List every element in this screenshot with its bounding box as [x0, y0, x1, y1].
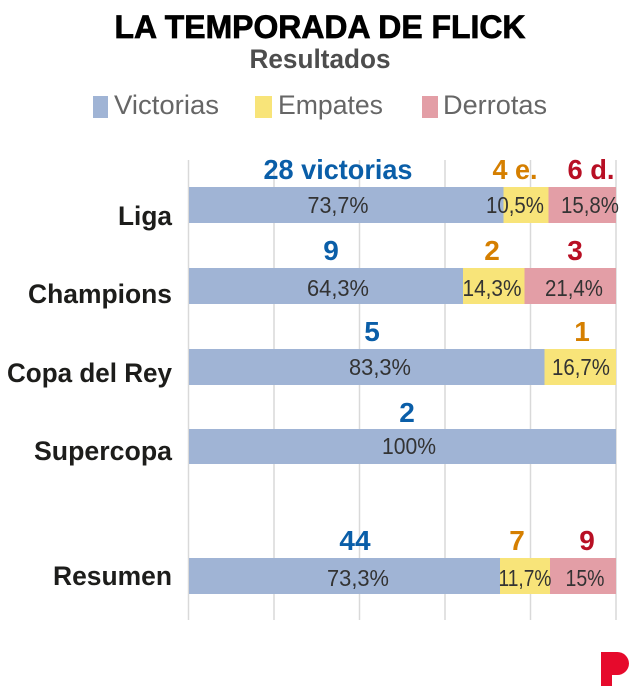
row: Resumen: Resumen: [53, 561, 172, 591]
row: Champions: 64,3%: [307, 275, 369, 301]
row: Liga: [118, 154, 619, 231]
row: Supercopa: 2: [399, 397, 415, 428]
row: Liga: 4 e.: [492, 154, 538, 185]
row: Resumen: 7: [509, 525, 525, 556]
row: Resumen: 44: [339, 525, 371, 556]
row: Champions: 14,3%: [462, 275, 522, 301]
row: Copa del Rey: 16,7%: [552, 354, 610, 380]
row: Liga: Liga: [118, 201, 173, 231]
row: Champions: 9: [323, 235, 339, 266]
legend: [93, 90, 547, 120]
row: Supercopa: Supercopa: [34, 436, 173, 466]
row: Supercopa: 100%: [382, 433, 436, 459]
row: Liga: 15,8%: [561, 192, 619, 218]
row: Copa del Rey: [7, 316, 616, 388]
row: Supercopa: [34, 397, 616, 466]
legend: Victorias: [114, 90, 219, 120]
row: Liga: 73,7%: [308, 192, 369, 218]
legend: Empates: [278, 90, 383, 120]
row: Resumen: 73,3%: [327, 565, 389, 591]
row: Copa del Rey: Copa del Rey: [7, 358, 172, 388]
row: Champions: 21,4%: [545, 275, 603, 301]
row: Liga: 6 d.: [568, 154, 614, 185]
row: Resumen: 15%: [566, 565, 605, 591]
row: Copa del Rey: 5: [364, 316, 380, 347]
row: Copa del Rey: 1: [574, 316, 590, 347]
row: Copa del Rey: 83,3%: [349, 354, 411, 380]
row: Resumen: [53, 525, 616, 594]
row: Champions: 2: [484, 235, 500, 266]
subtitle: Resultados: [250, 44, 390, 74]
row: Champions: 3: [567, 235, 583, 266]
icon: logo: [601, 652, 629, 686]
legend: Derrotas: [443, 90, 547, 120]
row: Resumen: 11,7%: [498, 565, 552, 591]
title: LA TEMPORADA DE FLICK: [114, 9, 526, 45]
row: Champions: [28, 235, 616, 309]
row: Liga: 28 victorias: [264, 154, 412, 185]
row: Champions: Champions: [28, 279, 172, 309]
row: Resumen: 9: [579, 525, 595, 556]
row: Liga: 10,5%: [486, 192, 544, 218]
